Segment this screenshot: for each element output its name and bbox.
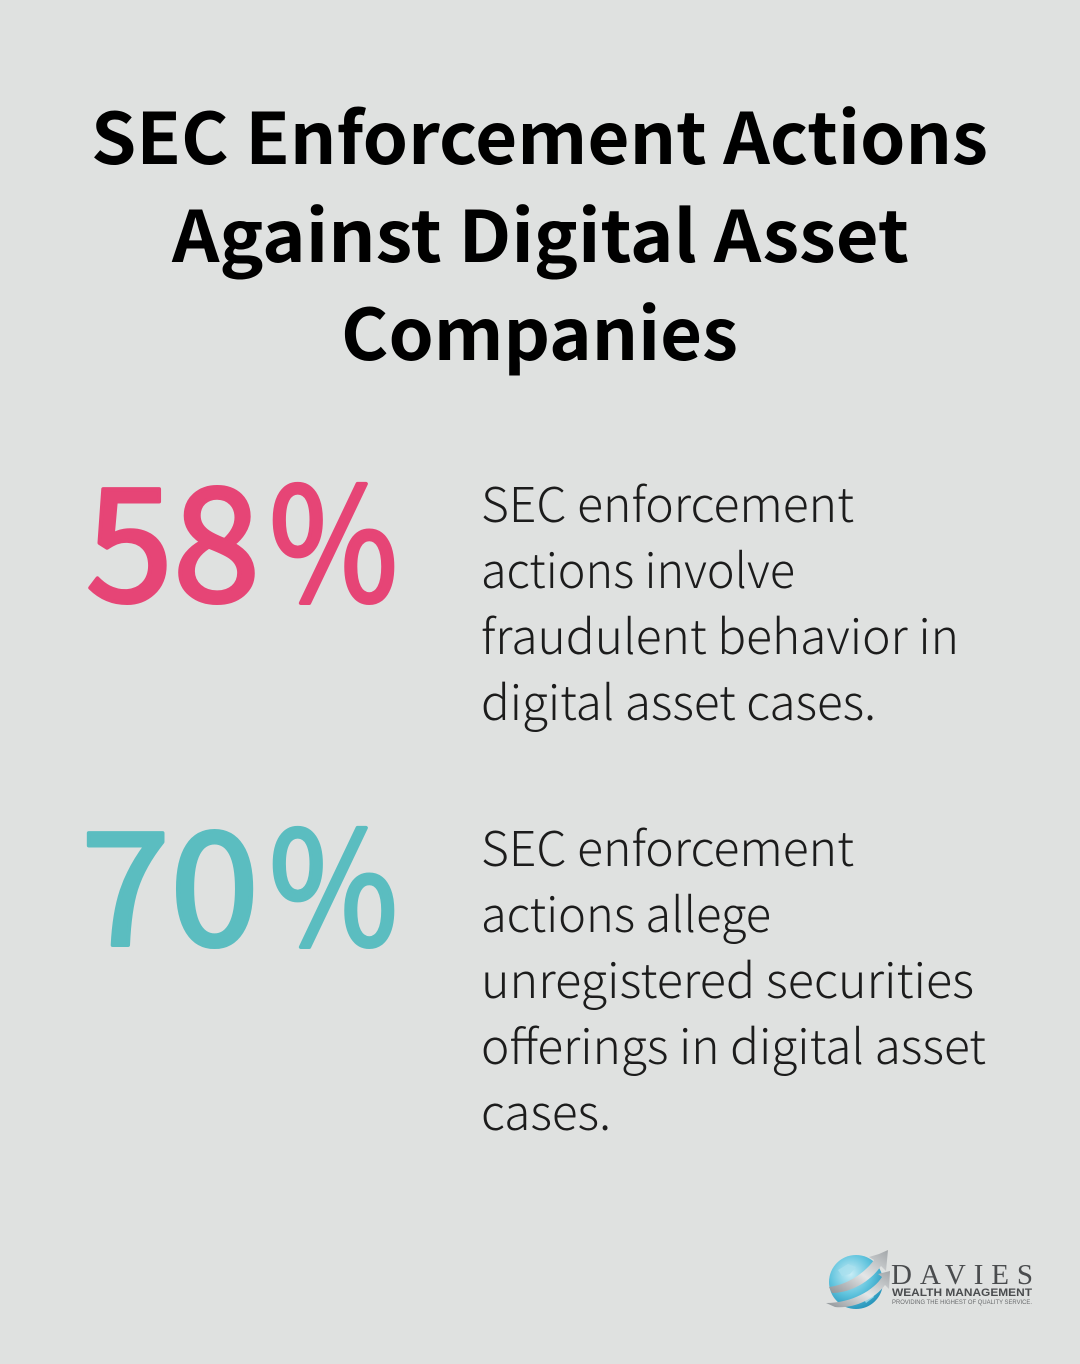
number: 70%: % <box>269 764 398 991</box>
wordmark: DAVIES: DAVIES <box>891 1259 1033 1291</box>
title <box>91 83 988 381</box>
number: 70% <box>81 764 398 991</box>
panel: fraudulent behavior statistic <box>86 420 959 734</box>
logo: Davies Wealth Management <box>826 1250 1033 1309</box>
description: unregistered securities: unregistered securities <box>481 942 974 1012</box>
panel: unregistered securities statistic <box>81 764 986 1144</box>
description: fraudulent behavior <box>481 466 959 734</box>
description: unregistered securities: actions allege <box>481 876 771 946</box>
description: fraudulent behavior: SEC enforcement <box>481 466 854 536</box>
description: unregistered securities: offerings in digital asset <box>481 1008 986 1078</box>
icon: globe with arrows <box>826 1250 890 1309</box>
description: fraudulent behavior: digital asset cases. <box>481 664 876 734</box>
number: 58%: % <box>269 420 398 647</box>
tagline: PROVIDING THE HIGHEST OF QUALITY SERVICE. <box>892 1299 1032 1306</box>
description: unregistered securities <box>481 810 986 1144</box>
description: fraudulent behavior: actions involve <box>481 532 795 602</box>
title: Against Digital Asset <box>171 181 909 283</box>
description: unregistered securities: SEC enforcement <box>481 810 854 880</box>
number: 70%: 70 <box>81 764 259 991</box>
wordmark: WEALTH MANAGEMENT: WEALTH MANAGEMENT <box>892 1287 1032 1299</box>
title: Companies <box>341 279 738 381</box>
number: 58% <box>86 420 398 647</box>
description: unregistered securities: cases. <box>481 1074 611 1144</box>
number: 58%: 58 <box>86 420 260 647</box>
title: SEC Enforcement Actions <box>91 83 988 185</box>
description: fraudulent behavior: fraudulent behavior in <box>481 598 959 668</box>
